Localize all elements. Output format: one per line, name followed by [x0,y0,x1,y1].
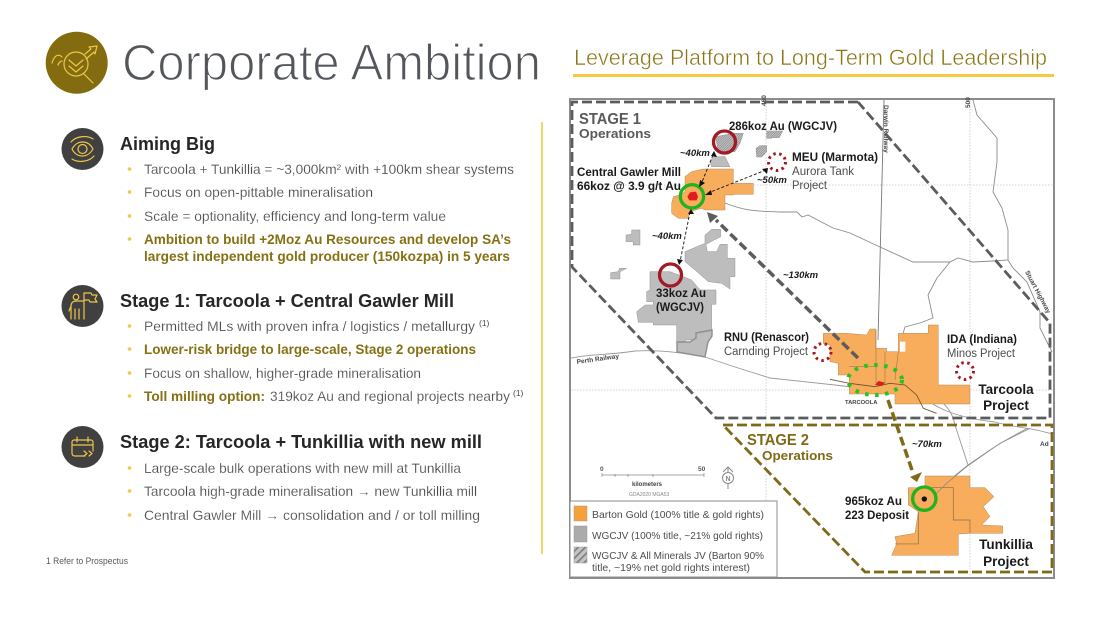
bullets: stage 1: 319koz Au and regional projects nearby [270,388,510,404]
panel: stage 1 [62,285,524,404]
arrow: central gawler to tarcoola [707,212,858,358]
panel: aiming big [62,128,514,264]
small map labels: 460 [761,95,768,106]
panel: stage 2 [62,426,482,523]
deposit labels: 965koz Au [845,496,902,508]
bullets: stage 1: (1) [479,318,490,328]
bullets: aiming big: Focus on open-pittable mineralisation [144,184,373,200]
heading: aiming big: Aiming Big [120,133,215,154]
project labels [978,382,1034,569]
bullets: stage 1 [128,318,524,404]
bullets: aiming big: Tarcoola + Tunkillia = ~3,000km² with +100km shear systems [144,161,514,177]
icon: corporate ambition magnifier [46,32,108,94]
bullets: stage 1: Focus on shallow, higher-grade mineralisation [144,365,421,381]
bullets: stage 1: Permitted MLs with proven infra / logistics / metallurgy [144,318,475,334]
bullets: aiming big: Ambition to build +2Moz Au Resources and develop SA’s [144,231,511,247]
deposit labels: MEU (Marmota) [792,152,878,164]
small map labels: Stuart Highway [1023,270,1052,315]
icon: person with flag [62,285,104,327]
scale bar [600,466,706,498]
legend [570,501,777,577]
deposit labels: 286koz Au (WGCJV) [729,121,837,133]
Barton Gold tarcoola tenement [823,325,970,413]
deposit labels: Project [792,180,828,192]
stage 1 label: STAGE 1 [579,111,641,128]
icon: calendar [62,426,104,468]
map grid lines [571,100,1053,577]
project labels: Tarcoola [978,382,1034,397]
scale bar: GDA2020 MGA53 [629,492,670,498]
north arrow: N [726,476,731,483]
WGCJV tenements [611,157,735,345]
deposit labels [577,121,1017,522]
legend: WGCJV [574,526,763,542]
small map labels: TARCOOLA [845,400,878,406]
title: Corporate Ambition [122,34,541,91]
deposit labels: Central Gawler Mill [577,167,681,179]
scale bar: 50 [698,466,706,473]
heading: stage 2: Stage 2: Tarcoola + Tunkillia with new mill [120,431,482,452]
stage 1 label: Operations [579,126,651,141]
scale bar: 0 [600,466,604,473]
bullets: stage 2 [128,460,480,523]
bullets: stage 1: Toll milling option: [144,388,265,404]
dotted project circles [768,154,974,380]
subtitle underline [573,74,1054,77]
deposit labels: 33koz Au [656,288,706,300]
deposit labels: Carnding Project [724,346,809,358]
small map labels [576,95,1052,448]
bullets: aiming big: Scale = optionality, efficiency and long-term value [144,208,446,224]
distance arrow heads [677,151,768,265]
heading: stage 1: Stage 1: Tarcoola + Central Gawler Mill [120,290,454,311]
distance labels: ~70km [912,439,942,450]
project labels: Project [983,554,1029,569]
WGCJV and All Minerals tenements [716,131,783,157]
deposit labels: (WGCJV) [656,302,704,314]
stage 2 label: STAGE 2 [747,432,809,449]
legend: WGCJV and All Minerals JV [574,547,764,574]
bullets: aiming big [128,161,514,264]
map frame [570,99,1054,578]
map roads and railways [571,100,1052,500]
distance labels: ~40km [652,231,682,242]
distance labels: ~50km [757,175,787,186]
footnote: 1 Refer to Prospectus [46,556,128,566]
divider line [541,122,543,554]
deposit labels: 66koz @ 3.9 g/t Au [577,181,681,193]
small map labels: Darwin Railway [882,105,889,153]
dotted green tarcoola ring [848,365,902,395]
small map labels: 500 [965,97,972,108]
bullets: aiming big: largest independent gold producer (150kozpa) in 5 years [144,248,510,264]
stage 1 label [579,111,651,141]
Barton Gold central gawler tenement [672,169,753,218]
legend: WGCJV and All Minerals JV: WGCJV & All Minerals JV (Barton 90% [592,550,764,562]
bullets: stage 2: Large-scale bulk operations with new mill at Tunkillia [144,460,461,476]
deposit labels: 223 Deposit [845,510,909,522]
legend: WGCJV: WGCJV (100% title, ~21% gold rights) [592,530,763,542]
deposit labels: IDA (Indiana) [947,334,1017,346]
deposit labels: Minos Project [947,348,1016,360]
legend: WGCJV and All Minerals JV: title, ~19% net gold rights interest) [592,562,750,574]
panel: map [570,95,1054,578]
stage 1 boundary [572,102,1050,418]
bullets: stage 2: Tarcoola high-grade mineralisation → new Tunkillia mill [144,483,477,499]
bullets: stage 1: Lower-risk bridge to large-scale, Stage 2 operations [144,341,476,357]
deposit labels: RNU (Renascor) [724,332,809,344]
arrow: tarcoola to tunkillia [888,400,922,482]
small map labels: Ad [1040,441,1049,448]
map labels [577,111,1034,569]
project labels: Tunkillia [979,537,1033,552]
red project circles [660,131,736,286]
distance arrows [680,155,766,262]
stage 2 label [747,432,833,463]
subtitle: Leverage Platform to Long-Term Gold Leadership [574,45,1047,70]
stage 2 boundary [723,425,1052,572]
small map labels: Perth Railway [576,353,620,366]
stage 2 label: Operations [762,448,833,463]
Barton Gold tunkillia tenement [892,428,1030,555]
legend: Barton Gold: Barton Gold (100% title & gold rights) [592,509,764,521]
bullets: stage 1: (1) [513,388,524,398]
WGCJV lower tenement [677,330,712,357]
project labels: Project [983,398,1029,413]
bullets: stage 2: Central Gawler Mill → consolidation and / or toll milling [144,507,480,523]
distance labels: ~40km [680,148,710,159]
scale bar: kilometers [632,482,663,488]
icon: eye [62,128,104,170]
north arrow [722,467,734,489]
distance labels: ~130km [783,270,819,281]
distance labels [652,148,942,450]
deposit labels: Aurora Tank [792,166,854,178]
